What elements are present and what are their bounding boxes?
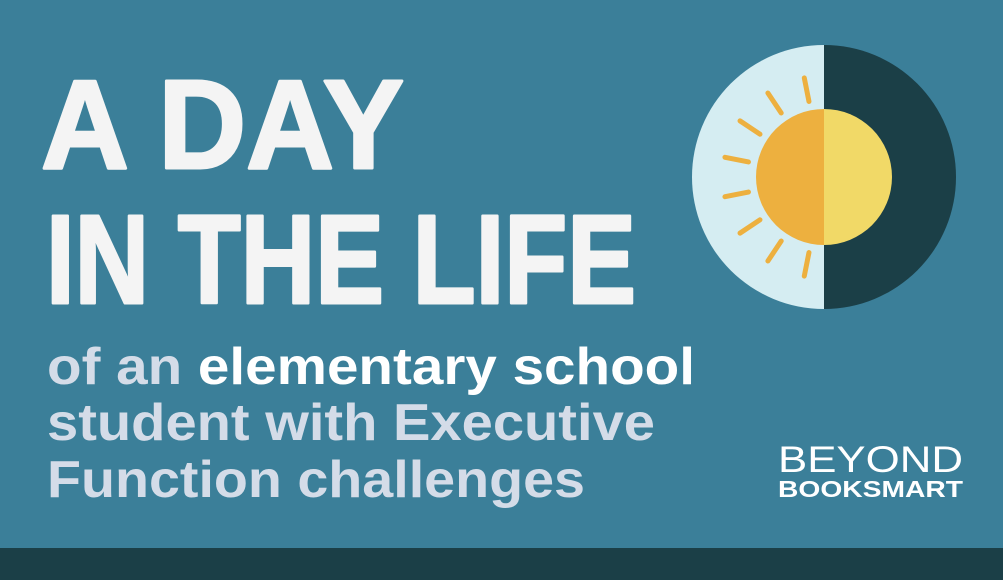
title xyxy=(41,54,636,330)
bottom bar xyxy=(0,548,1003,580)
icon: day/night sun xyxy=(692,45,956,309)
logo: BEYOND xyxy=(778,439,963,480)
subtitle xyxy=(47,338,695,509)
subtitle: of an elementary school xyxy=(47,338,695,396)
logo: BOOKSMART xyxy=(778,476,963,502)
subtitle: Function challenges xyxy=(47,451,585,509)
title: A DAY xyxy=(41,54,404,195)
logo xyxy=(778,439,963,502)
title: IN THE LIFE xyxy=(46,189,636,330)
subtitle: student with Executive xyxy=(47,394,655,452)
